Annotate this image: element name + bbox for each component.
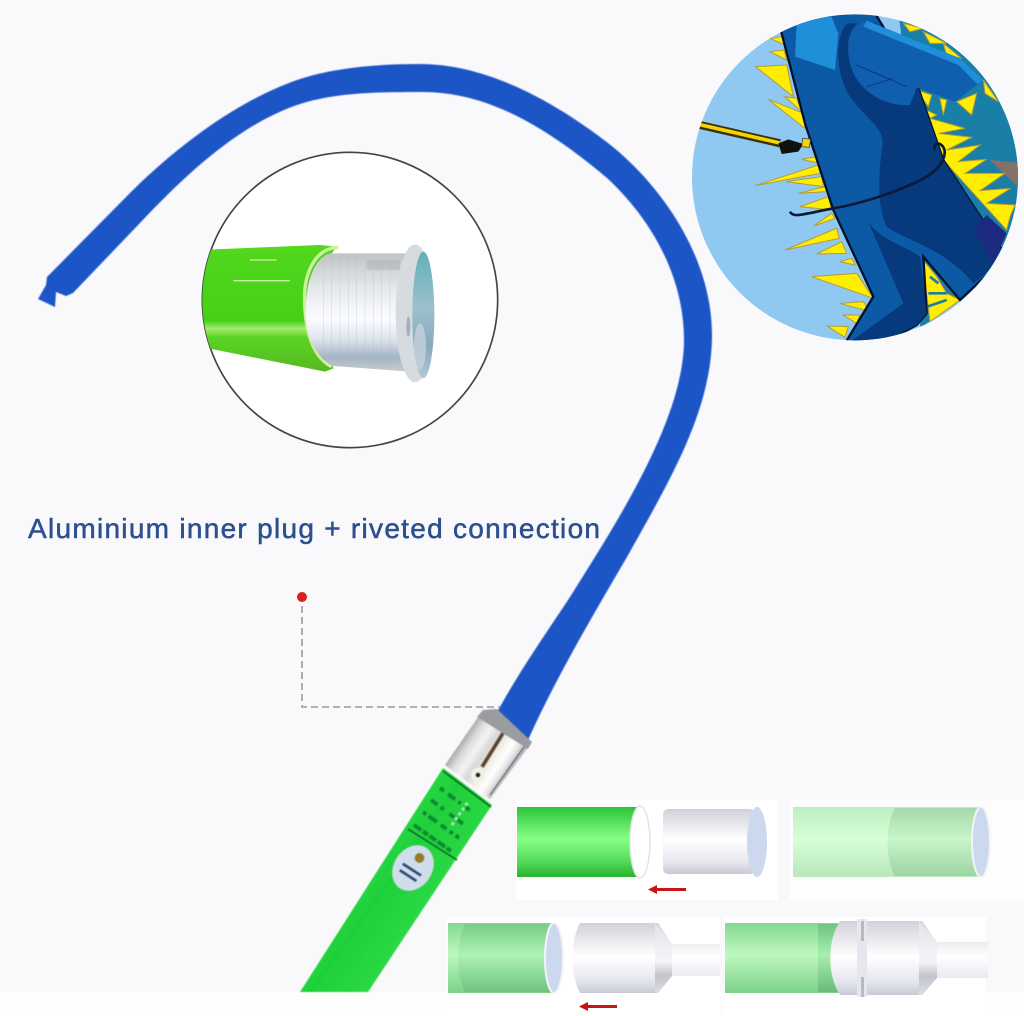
lower leg shading (848, 222, 927, 343)
callout leader with red dot (297, 592, 500, 707)
blue flexible rod (38, 64, 712, 740)
rivet slits (861, 921, 864, 941)
teal background (899, 20, 1018, 266)
worker body (777, 0, 1007, 343)
thread lines (323, 256, 390, 360)
reducer plug (572, 923, 720, 993)
assembled plug (830, 921, 988, 995)
black cord (790, 144, 945, 215)
ferrule reflection (482, 730, 505, 767)
step 1: green tube and sleeve (516, 800, 778, 900)
yellow rod (700, 125, 780, 143)
step 3: tube and reducer plug (447, 917, 720, 1016)
green tube end (200, 245, 337, 372)
step 2: sleeve inserted (789, 800, 1024, 900)
callout text: Aluminium inner plug + riveted connection (28, 513, 600, 544)
rod handle (778, 139, 803, 154)
scene circle: cartoon worker with rod (690, 0, 1024, 345)
printed band (408, 771, 491, 860)
yellow spikes (755, 23, 1015, 337)
round sticker (384, 838, 442, 898)
dark torso shading (838, 23, 1007, 283)
aluminium sleeve (306, 253, 410, 372)
scene sky (690, 0, 1024, 345)
arrow: step 3 direction (579, 1002, 617, 1011)
worker arm (848, 21, 983, 105)
red arrow (648, 885, 686, 894)
ferrule collar (477, 709, 532, 749)
metal ferrule (445, 710, 532, 799)
inset circle: aluminium plug close-up (200, 152, 498, 448)
green shaft (300, 768, 492, 992)
plug flange (396, 244, 434, 382)
rivet (471, 768, 485, 782)
inner sleeve (663, 809, 755, 874)
light shoulder patch (795, 13, 838, 70)
green handle with metal ferrule (300, 709, 532, 992)
glove (973, 215, 1007, 263)
step 4: assembled connection (724, 917, 988, 1016)
